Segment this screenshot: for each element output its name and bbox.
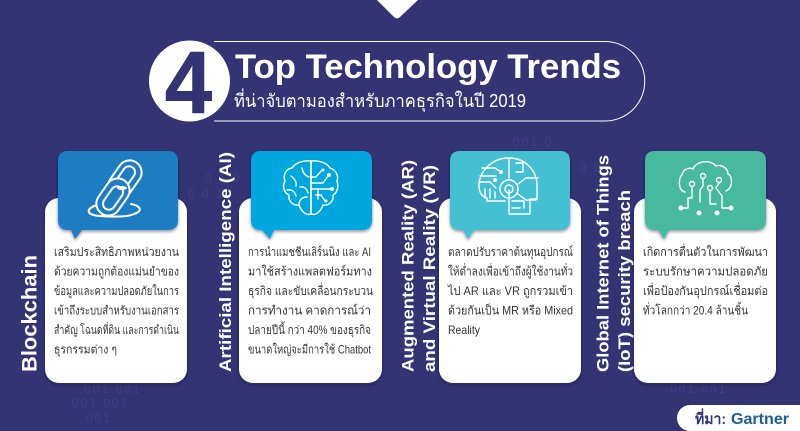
panel: IoT security [594, 151, 776, 383]
subtitle: ที่น่าจับตามองสำหรับภาคธุรกิจในปี 2019 [234, 88, 526, 112]
heading line 1: Augmented Reality (AR) [398, 160, 418, 372]
text: 001 001 [72, 396, 129, 410]
body text: ทั่วโลกกว่า 20.4 ล้านชิ้น [643, 302, 748, 318]
text: 0 0 [580, 161, 603, 175]
body text: ด้วยกันเป็น MR หรือ Mixed [448, 302, 573, 318]
icon: brain [284, 161, 338, 214]
body text: มาใช้สร้างแพลตฟอร์มทาง [248, 264, 372, 278]
body text: สำคัญ โฉนดที่ดิน และการดำเนิน [54, 321, 179, 337]
heading: Blockchain [18, 255, 42, 372]
body text: ธุรกรรมต่าง ๆ [54, 342, 117, 358]
speech bubble [251, 151, 372, 239]
body text: การนำแมชชีนเลิร์นนิง และ AI [248, 245, 371, 259]
heading line 2: and Virtual Reality (VR) [420, 165, 439, 372]
body text: ระบบรักษาความปลอดภัย [643, 264, 768, 278]
speech bubble [58, 151, 178, 239]
heading: Artificial Intelligence (AI) [216, 152, 235, 372]
title: Top Technology Trends [235, 48, 621, 86]
number 4: 4 [165, 33, 212, 132]
text: 0 1 0 [205, 171, 242, 185]
card [45, 198, 187, 383]
body text: ด้วยความถูกต้องแม่นยำของ [54, 264, 179, 280]
text: 001 001 [670, 382, 727, 396]
icon: robot head [479, 158, 538, 214]
body text [643, 243, 768, 318]
source label: ที่มา: [695, 408, 726, 428]
body text: เสริมประสิทธิภาพหน่วยงาน [54, 245, 179, 259]
text: 001 001 [84, 382, 141, 396]
icon: cloud network [678, 162, 734, 216]
number circle [149, 40, 230, 122]
heading line 1: Global Internet of Things [594, 155, 612, 372]
body text [248, 245, 373, 356]
body text [447, 245, 573, 337]
text: 001 0 [513, 135, 553, 149]
body text: ธุรกิจ และขับเคลื่อนกระบวน [248, 282, 373, 299]
card [439, 198, 581, 383]
body text [54, 245, 179, 358]
source badge [677, 405, 800, 431]
panel: AR and VR [398, 151, 581, 383]
body text: ไป AR และ VR ถูกรวมเข้า [447, 284, 573, 299]
body text: การทำงาน คาดการณ์ว่า [248, 304, 371, 318]
title badge [149, 33, 645, 132]
panel: Blockchain [18, 151, 187, 383]
heading line 2: (IoT) security breach [615, 190, 634, 372]
title outline [214, 42, 645, 121]
body text: ข้อมูลและความปลอดภัยในการ [54, 284, 179, 299]
body text: ขนาดใหญ่จะมีการใช้ Chatbot [248, 342, 372, 356]
speech bubble [450, 151, 570, 239]
card [239, 198, 382, 383]
body text: เข้าถึงระบบสำหรับงานเอกสาร [54, 304, 179, 318]
panel: Artificial Intelligence [216, 151, 382, 383]
text: 0 0 1 [188, 187, 225, 201]
text: 001 [86, 411, 112, 425]
body text: ตลาดปรับราคาต้นทุนอุปกรณ์ [448, 245, 573, 260]
body text: ปลายปีนี้ กว่า 40% ของธุรกิจ [248, 321, 371, 338]
icon: top arrow [377, 0, 418, 18]
body text: ให้ต่ำลงเพื่อเข้าถึงผู้ใช้งานทั่ว [448, 262, 573, 280]
body text: เพื่อป้องกันอุปกรณ์เชื่อมต่อ [643, 282, 768, 299]
card [634, 198, 776, 383]
icon: chain link [89, 156, 146, 220]
Gartner logo text: Gartner [731, 411, 789, 428]
speech bubble [645, 151, 766, 239]
badge shape [677, 405, 800, 431]
body text: เกิดการตื่นตัวในการพัฒนา [643, 243, 768, 259]
body text: Reality [448, 323, 480, 337]
